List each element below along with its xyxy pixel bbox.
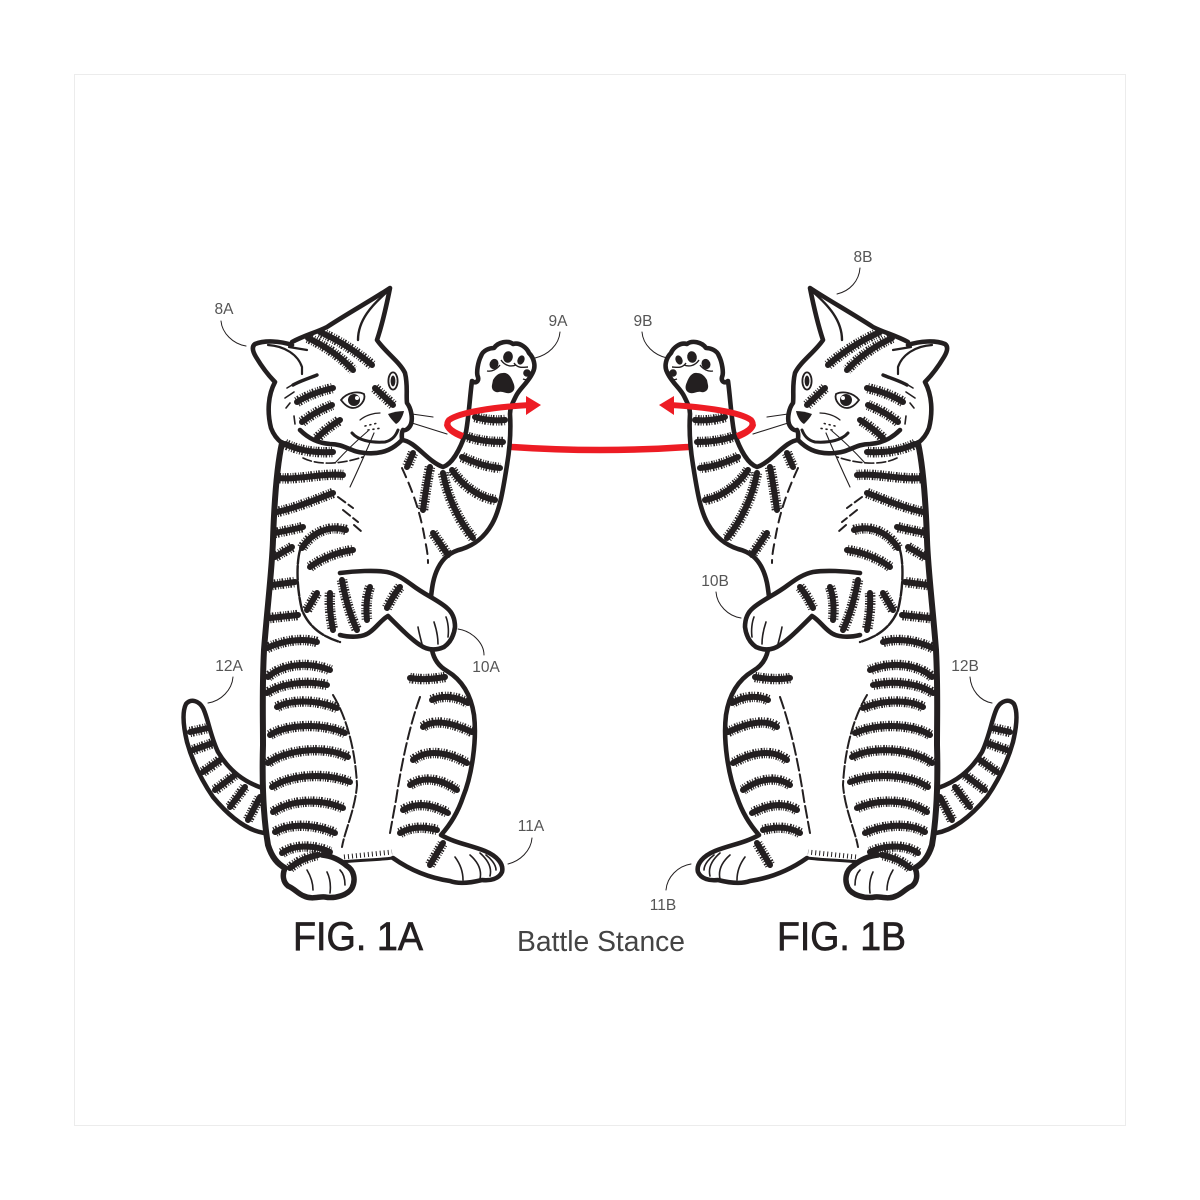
cat A [183, 288, 535, 898]
label 11B: 11B [650, 897, 676, 914]
label 10B [701, 573, 741, 618]
label 9B [634, 313, 667, 358]
paper panel [74, 74, 1126, 1126]
label 10A [458, 629, 500, 676]
label 8A: 8A [215, 301, 234, 318]
label 12B: 12B [951, 658, 979, 675]
label 8B: 8B [854, 249, 872, 266]
label 12B [951, 658, 992, 703]
red ring: upper arc and arrow for cat B [659, 396, 753, 436]
label 8A [215, 301, 246, 346]
red ring: upper arc and arrow for cat A [447, 396, 541, 436]
label 9B: 9B [634, 313, 652, 330]
label 11A: 11A [518, 818, 545, 835]
label 9A: 9A [549, 313, 568, 330]
label 11A [508, 818, 545, 864]
red ring: lower span behind the arms [447, 424, 753, 450]
label 8B [837, 249, 872, 294]
cat B [665, 288, 1017, 898]
figure title 1B: FIG. 1B [777, 915, 906, 959]
label 10B: 10B [701, 573, 729, 590]
label 12A: 12A [215, 658, 243, 675]
figure title 1A: FIG. 1A [293, 915, 423, 959]
label 9A [535, 313, 568, 358]
label 10A: 10A [472, 659, 500, 676]
reference labels and leader lines [208, 249, 992, 914]
label 12A [208, 658, 243, 703]
label 11B [650, 864, 691, 914]
caption: Battle Stance [517, 926, 685, 958]
